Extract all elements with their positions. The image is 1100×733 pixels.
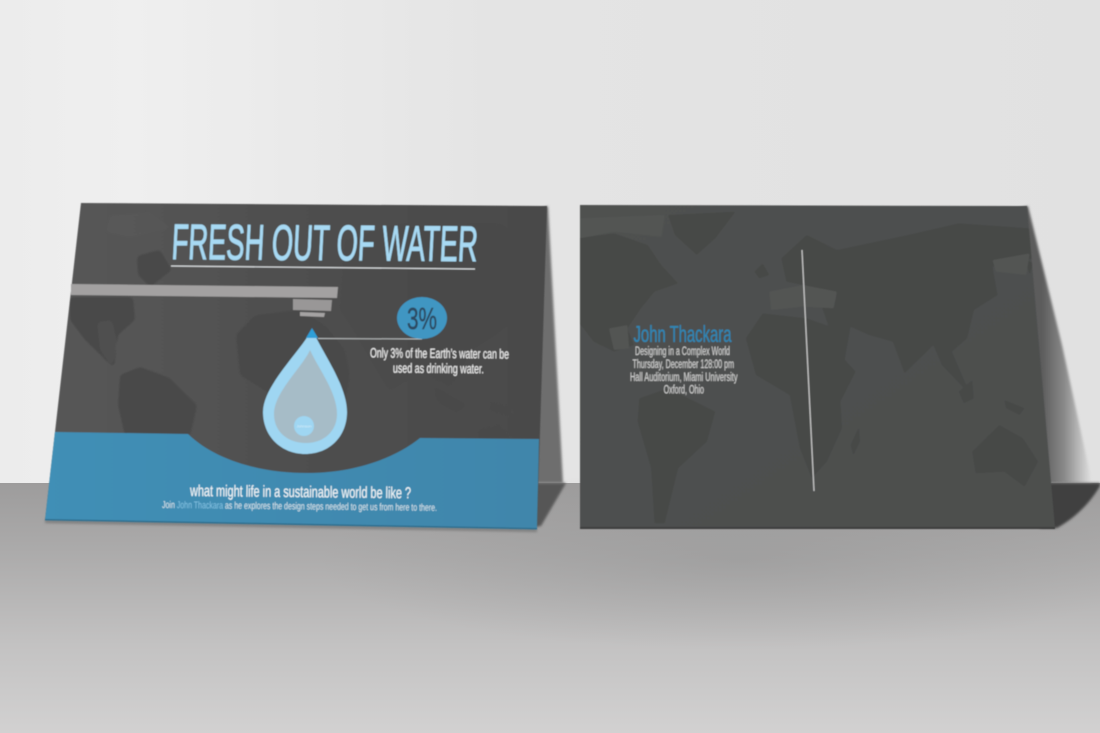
- lighter land patches: [610, 254, 1029, 350]
- text: event details: Designing in a Complex World: [635, 346, 730, 358]
- text: drinking water fact: Only 3% of the Earth’s water can be: [370, 345, 509, 362]
- card background: [45, 203, 547, 529]
- text: drinking water fact: [370, 345, 509, 377]
- callout: 3% badge: 3%: [407, 301, 437, 336]
- world map background: [580, 230, 1031, 395]
- icon: water drop: Johnson: [296, 424, 312, 428]
- heading: speaker name: John Thackara: [634, 321, 732, 347]
- icon: faucet: [71, 284, 338, 317]
- shadow: left card on floor: [530, 483, 566, 528]
- text: invitation line: Join John Thackara as he explores the design steps needed to get us from here to there.: [162, 500, 437, 514]
- world map background: [70, 252, 195, 434]
- text: event details: Hall Auditorium, Miami University: [630, 372, 738, 384]
- shadow: left card on wall: [530, 206, 563, 483]
- card background: [580, 205, 1055, 528]
- text: drinking water fact: used as drinking water.: [393, 361, 484, 376]
- text: event details: Oxford, Ohio: [664, 384, 704, 396]
- icon: water drop: [263, 328, 347, 454]
- panel: back of invitation card: [577, 205, 1055, 529]
- callout line: [318, 338, 422, 340]
- lighter land patches: [97, 212, 170, 367]
- divider line: [802, 250, 814, 491]
- shadow: right card on floor: [1040, 483, 1100, 528]
- contact shadow: [45, 520, 537, 532]
- panel: front of invitation card: [45, 203, 547, 530]
- text: event details: Thursday, December 128:00 pm: [632, 359, 734, 371]
- heading: question: what might life in a sustainable world be like ?: [189, 483, 411, 502]
- background wall: [0, 0, 1100, 483]
- blue water band: [45, 432, 539, 529]
- title: FRESH OUT OF WATER: [170, 214, 479, 272]
- blue band bottom edge: [45, 519, 537, 530]
- shadow: right card on wall: [1020, 206, 1092, 483]
- text: event details: [630, 346, 738, 396]
- title underline: [171, 266, 475, 269]
- callout: 3% badge: [397, 297, 447, 339]
- floor: [0, 470, 1100, 733]
